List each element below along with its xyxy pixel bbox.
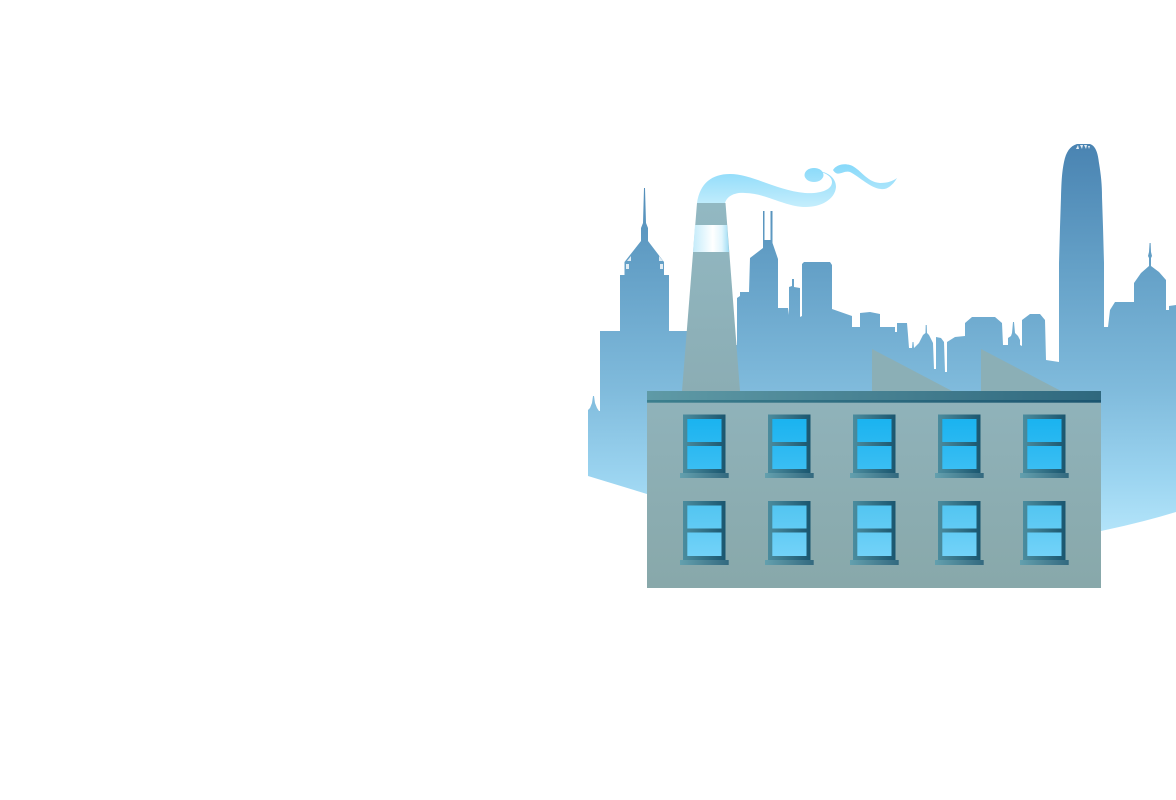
smoke puff: [804, 168, 824, 182]
window row 1 column 4: [935, 414, 984, 478]
tower crown highlight: [1076, 145, 1090, 149]
sawtooth roof right: [981, 349, 1061, 391]
window row 1 column 3: [850, 414, 899, 478]
factory roof: [647, 391, 1101, 400]
chimney light band: [693, 225, 729, 252]
sawtooth roof left: [872, 349, 952, 391]
window row 2 column 4: [935, 501, 984, 565]
tower roof window details: [626, 256, 663, 269]
smoke plume: [697, 164, 897, 207]
city skyline silhouette: [588, 144, 1176, 580]
window row 2 column 2: [765, 501, 814, 565]
roof stripe: [647, 400, 1101, 403]
chimney: [682, 203, 740, 391]
window row 2 column 1: [680, 501, 729, 565]
factory building: [647, 391, 1101, 588]
window row 1 column 2: [765, 414, 814, 478]
window row 1 column 5: [1020, 414, 1069, 478]
window row 2 column 3: [850, 501, 899, 565]
window row 1 column 1: [680, 414, 729, 478]
window row 2 column 5: [1020, 501, 1069, 565]
smoke wisp: [833, 164, 897, 189]
